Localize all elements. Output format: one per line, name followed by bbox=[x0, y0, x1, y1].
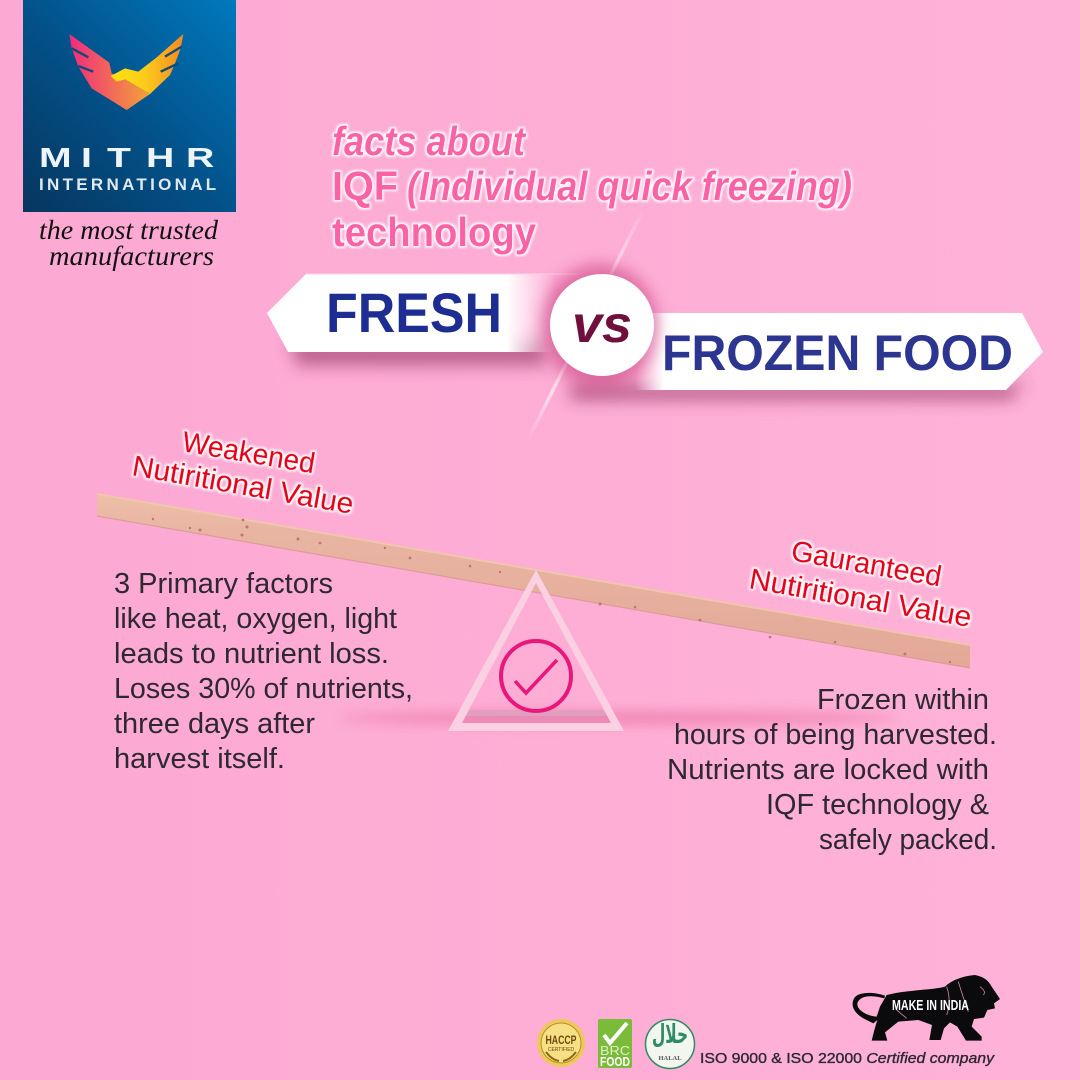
badge: HACCP: CERTIFIED bbox=[548, 1047, 575, 1053]
tagline: manufacturers bbox=[49, 241, 214, 271]
icon: winged handshake bbox=[69, 34, 183, 110]
logo subtitle: INTERNATIONAL bbox=[39, 175, 219, 194]
heading: (Individual quick freezing) bbox=[407, 163, 852, 209]
badge: HACCP: HACCP bbox=[546, 1033, 576, 1047]
text block: fresh facts: Loses 30% of nutrients, bbox=[114, 673, 413, 705]
text block: frozen facts: hours of being harvested. bbox=[674, 719, 997, 751]
badge: HACCP bbox=[537, 1019, 585, 1067]
banner: frozen food: FROZEN FOOD bbox=[662, 325, 1013, 381]
text block: frozen facts: safely packed. bbox=[819, 824, 997, 856]
vs badge: vs bbox=[572, 296, 632, 354]
banner: fresh bbox=[267, 274, 580, 366]
text block: fresh facts: harvest itself. bbox=[114, 743, 285, 775]
text block: fresh facts: leads to nutrient loss. bbox=[114, 638, 389, 670]
certification caption: ISO 9000 & ISO 22000 Certified company bbox=[700, 1051, 995, 1067]
label: guaranteed nutritional value bbox=[747, 535, 974, 634]
icon: check mark circle bbox=[501, 641, 571, 711]
vs badge bbox=[542, 264, 658, 388]
text block: fresh facts: 3 Primary factors bbox=[114, 568, 333, 600]
logo: Mithr International bbox=[23, 0, 236, 212]
heading: facts about bbox=[332, 118, 527, 164]
seesaw bbox=[97, 494, 970, 731]
badge: Halal bbox=[646, 1020, 694, 1068]
decorative diagonal bbox=[528, 210, 643, 440]
text block: fresh facts: three days after bbox=[114, 708, 315, 740]
certification badges bbox=[537, 1019, 694, 1069]
text block: frozen facts: Nutrients are locked with bbox=[667, 754, 989, 786]
logo wordmark: MITHR bbox=[39, 142, 214, 174]
text block: frozen facts: IQF technology & bbox=[766, 789, 989, 821]
badge: BRC Food: BRC bbox=[600, 1043, 630, 1058]
icon: make in india lion bbox=[853, 975, 1000, 1041]
tagline: the most trusted bbox=[39, 215, 219, 245]
label: guaranteed nutritional value: Gauranteed bbox=[789, 535, 944, 593]
banner: frozen food bbox=[570, 313, 1043, 400]
label: weakened nutritional value: Nutiritional Value bbox=[130, 450, 356, 521]
badge: Halal: HALAL bbox=[658, 1055, 682, 1062]
badge: Halal: حلال bbox=[652, 1020, 688, 1050]
seesaw plank bbox=[97, 494, 970, 668]
lion label: MAKE IN INDIA bbox=[892, 997, 969, 1014]
floor shadow bbox=[340, 711, 900, 725]
heading: technology bbox=[332, 209, 536, 255]
banner: fresh: FRESH bbox=[326, 281, 502, 344]
label: weakened nutritional value: Weakened bbox=[180, 426, 317, 480]
badge: BRC Food: FOOD bbox=[600, 1054, 630, 1069]
badge: BRC Food bbox=[598, 1019, 632, 1069]
heading bbox=[332, 118, 852, 255]
text block: fresh facts: like heat, oxygen, light bbox=[114, 603, 397, 635]
fulcrum floor shade bbox=[462, 710, 611, 723]
text block: frozen facts: Frozen within bbox=[817, 684, 989, 716]
heading: IQF bbox=[332, 163, 398, 209]
fulcrum triangle bbox=[448, 570, 624, 731]
label: guaranteed nutritional value: Nutiritional Value bbox=[747, 563, 974, 634]
